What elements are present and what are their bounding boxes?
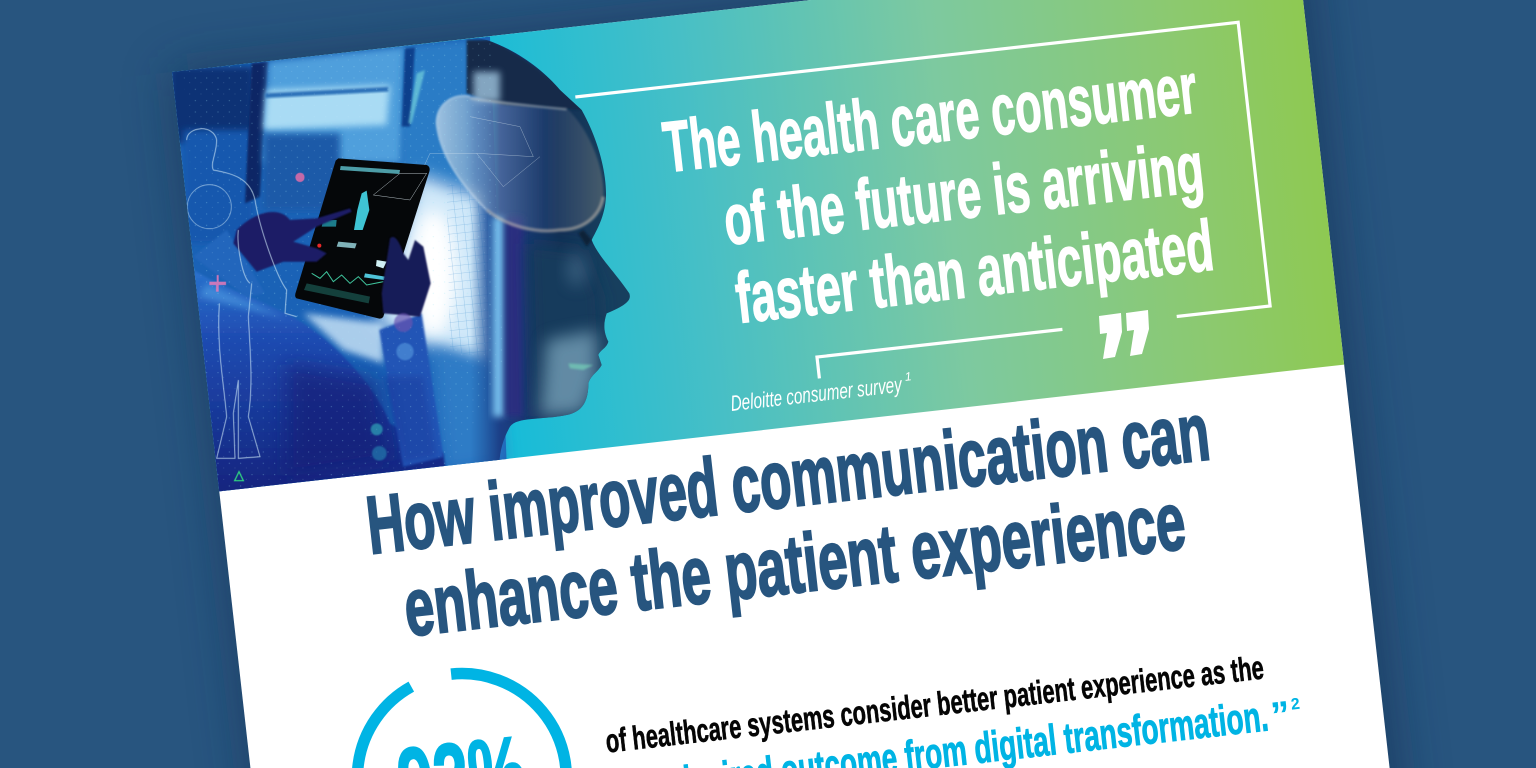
title	[362, 386, 1224, 657]
photo background tones	[170, 40, 503, 473]
quote text	[659, 49, 1218, 345]
quote source: Deloitte consumer survey	[729, 372, 904, 416]
stat description: 2	[1290, 696, 1301, 714]
photo base	[170, 37, 507, 497]
quote source	[729, 369, 914, 416]
stat ring	[357, 674, 566, 768]
quote source: 1	[904, 369, 912, 384]
medical body outline	[187, 129, 297, 458]
shoulders and coat	[183, 37, 503, 497]
photo: doctor with tablet and double-exposure head	[170, 37, 637, 497]
head silhouette	[463, 37, 637, 477]
quote frame	[575, 22, 1273, 402]
hands	[233, 208, 431, 461]
green triangle marker	[235, 472, 243, 481]
brain overlay	[410, 96, 603, 231]
quote text: of the future is arriving	[720, 127, 1208, 261]
tablet	[295, 158, 430, 319]
panel: gradient header band	[172, 0, 1344, 491]
icon: closing quotation mark	[1099, 310, 1149, 359]
quote text: faster than anticipated	[732, 206, 1217, 339]
heart marker	[295, 173, 305, 182]
page content	[322, 22, 1319, 768]
quote text: The health care consumer	[659, 49, 1201, 188]
pink cross marker	[209, 275, 226, 292]
stat description: ”	[1269, 694, 1292, 738]
